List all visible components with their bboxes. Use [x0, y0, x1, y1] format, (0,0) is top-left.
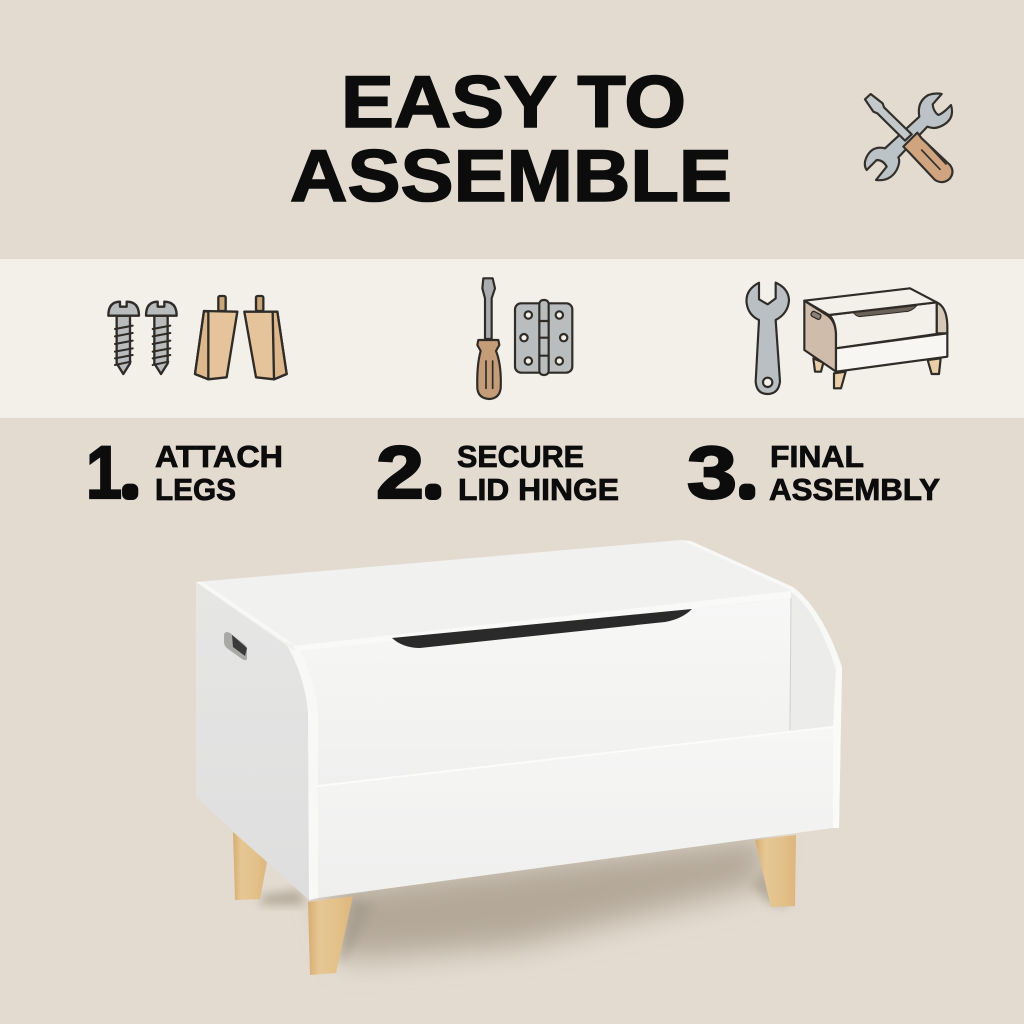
step 1 label: LEGS [155, 472, 236, 507]
title: ASSEMBLE [290, 136, 732, 217]
wooden legs [233, 832, 796, 975]
screw one [108, 302, 139, 374]
step 1 label: ATTACH [155, 439, 283, 474]
step 1 label: 1 [86, 431, 122, 514]
screw two [146, 302, 177, 374]
hinge [515, 300, 572, 375]
wooden leg two [244, 296, 287, 379]
icon: wrench and storage box [746, 283, 947, 394]
strip top highlight [318, 726, 833, 787]
step 3 label: ASSEMBLY [769, 472, 940, 507]
step 1 label: . [126, 468, 134, 501]
white storage chest [196, 540, 842, 975]
lid handle slot [392, 609, 692, 648]
step 3 label: FINAL [770, 439, 864, 474]
floor shadow [260, 836, 790, 965]
icon band [0, 259, 1024, 418]
front panel [297, 598, 791, 786]
step 1 label [86, 431, 283, 514]
right side panel [681, 540, 842, 828]
icon: screws and wooden legs [108, 296, 287, 379]
mini box [804, 288, 947, 388]
step 3 label: 3 [687, 431, 737, 514]
lower front strip [318, 726, 833, 898]
step 3 label: . [743, 468, 751, 501]
right inner face [791, 592, 836, 732]
icon: crossed wrench and screwdriver [865, 94, 952, 182]
left edge strip [284, 641, 318, 900]
step 2 label [376, 431, 619, 514]
title [290, 62, 732, 217]
step 2 label: LID HINGE [458, 472, 619, 507]
lid [196, 540, 791, 650]
step 2 label: 2 [376, 431, 424, 514]
icon: screwdriver and hinge [477, 278, 572, 399]
right end edge [833, 667, 842, 828]
step 3 label [687, 431, 940, 514]
wrench [746, 283, 789, 394]
wooden leg one [195, 296, 237, 379]
step 2 label: . [429, 468, 437, 501]
title: EASY TO [341, 62, 686, 143]
screwdriver [477, 278, 501, 399]
side handle slot [224, 632, 247, 660]
lid edge [293, 591, 791, 651]
left side panel [196, 582, 309, 900]
step 2 label: SECURE [457, 439, 584, 474]
recess corner line [790, 598, 791, 730]
